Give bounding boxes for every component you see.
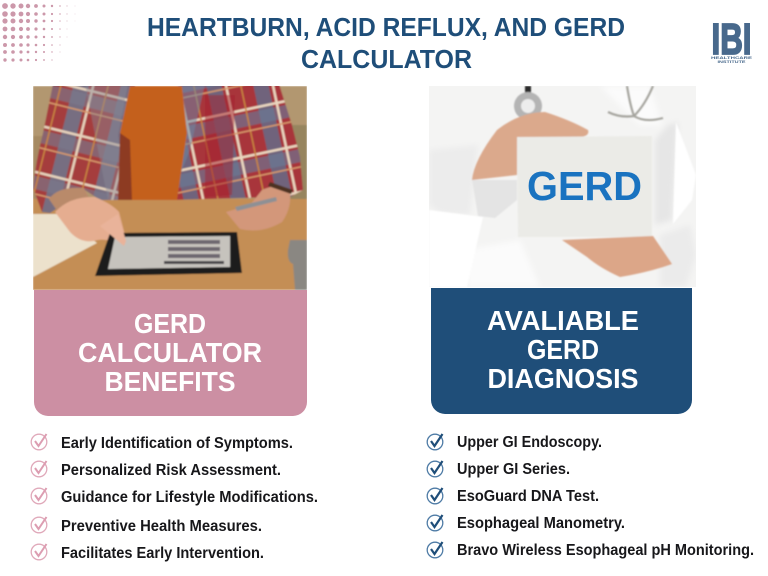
item: Bravo pH monitoring: Bravo Wireless Esophageal pH Monitoring. bbox=[457, 542, 754, 559]
item: personalized risk: Personalized Risk Assessment. bbox=[61, 462, 281, 479]
logo: IBI Healthcare Institute: IBI bbox=[712, 15, 752, 64]
heading: GERD calculator benefits: GERD bbox=[134, 308, 206, 339]
list: benefits bbox=[31, 434, 318, 562]
heading: GERD calculator benefits bbox=[78, 308, 262, 397]
title: HEARTBURN, ACID REFLUX, AND GERD bbox=[147, 14, 625, 42]
photo: doctor holding GERD sign bbox=[429, 86, 696, 287]
heading: GERD calculator benefits: CALCULATOR bbox=[78, 337, 262, 368]
item: GI series: Upper GI Series. bbox=[457, 461, 570, 478]
decorative dot pattern bbox=[2, 3, 76, 62]
title bbox=[147, 14, 625, 74]
logo: IBI Healthcare Institute: INSTITUTE bbox=[718, 59, 746, 64]
list: diagnoses bbox=[427, 434, 754, 559]
heading: GERD calculator benefits: BENEFITS bbox=[104, 366, 236, 397]
item: endoscopy: Upper GI Endoscopy. bbox=[457, 434, 602, 451]
item: lifestyle guidance: Guidance for Lifestyle Modifications. bbox=[61, 489, 318, 506]
item: early identification: Early Identification of Symptoms. bbox=[61, 435, 293, 452]
item: early intervention: Facilitates Early Intervention. bbox=[61, 545, 264, 562]
item: manometry: Esophageal Manometry. bbox=[457, 515, 625, 532]
heading: available GERD diagnosis: DIAGNOSIS bbox=[488, 363, 638, 394]
heading: available GERD diagnosis: AVALIABLE bbox=[487, 305, 639, 336]
title: CALCULATOR bbox=[301, 46, 472, 74]
heading: available GERD diagnosis: GERD bbox=[527, 334, 599, 365]
heading: available GERD diagnosis bbox=[487, 305, 639, 394]
panel: GERD calculator benefits bbox=[34, 290, 307, 416]
panel: available GERD diagnosis bbox=[431, 288, 692, 414]
logo: IBI Healthcare Institute: HEALTHCARE bbox=[711, 55, 752, 60]
item: EsoGuard: EsoGuard DNA Test. bbox=[457, 488, 599, 505]
item: preventive measures: Preventive Health Measures. bbox=[61, 518, 262, 535]
sign text: GERD: GERD bbox=[527, 163, 642, 209]
photo: person taking online test on tablet bbox=[33, 84, 307, 290]
